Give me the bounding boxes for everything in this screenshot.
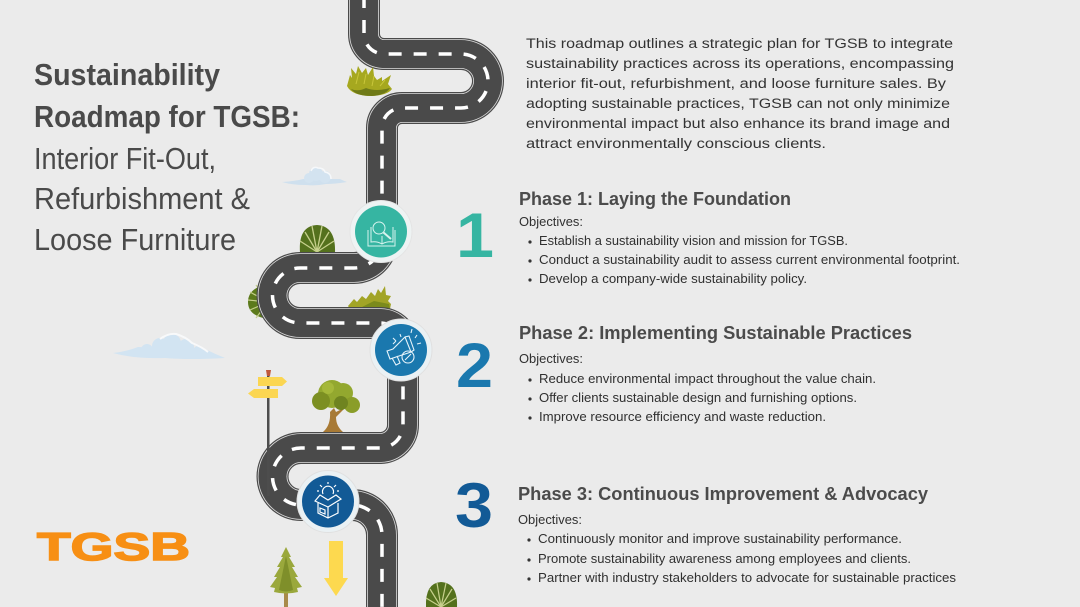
objectives: phase 1: Develop a company-wide sustainability policy. <box>539 272 807 286</box>
number 1: 1 <box>456 201 494 271</box>
objectives: phase 2: Reduce environmental impact throughout the value chain. <box>539 372 876 386</box>
objectives: phase 1: Objectives: <box>519 215 583 229</box>
title: Loose Furniture <box>34 222 236 257</box>
intro text block: adopting sustainable practices, TGSB can not only minimize <box>526 96 950 111</box>
heading: phase 2: Phase 2: Implementing Sustainable Practices <box>519 322 912 343</box>
objectives: phase 3: Partner with industry stakeholders to advocate for sustainable practices <box>538 571 956 585</box>
icon: fan plant bottom <box>426 582 457 607</box>
heading: phase 3: Phase 3: Continuous Improvement & Advocacy <box>518 483 929 504</box>
icon: signpost <box>248 370 287 496</box>
title: Sustainability <box>34 57 221 92</box>
objectives: phase 3: Promote sustainability awareness among employees and clients. <box>538 552 911 566</box>
intro text block <box>526 36 954 151</box>
icon: step 1 book and magnifier <box>350 200 412 262</box>
icon: cloud upper <box>282 167 347 185</box>
icon: bush middle <box>348 286 391 309</box>
objectives: phase 2: Improve resource efficiency and waste reduction. <box>539 410 826 424</box>
panel: phase 3 <box>518 483 956 585</box>
intro text block: attract environmentally conscious clients. <box>526 136 826 151</box>
objectives: phase 1 <box>519 215 960 286</box>
road <box>272 0 488 607</box>
heading: phase 1: Phase 1: Laying the Foundation <box>519 188 791 209</box>
icon: pine tree <box>270 547 302 607</box>
logo: TGSB: TGSB <box>37 526 190 569</box>
panel: phase 2 <box>519 322 912 424</box>
objectives: phase 2: Objectives: <box>519 352 583 366</box>
intro text block: This roadmap outlines a strategic plan for TGSB to integrate <box>526 36 953 51</box>
arrow: yellow down <box>324 541 348 596</box>
icon: step 2 megaphone <box>370 319 432 381</box>
icon: tree <box>312 380 360 432</box>
objectives: phase 3: Continuously monitor and improve sustainability performance. <box>538 532 902 546</box>
objectives: phase 3: Objectives: <box>518 513 582 527</box>
number 2: 2 <box>456 331 493 401</box>
icon: cloud lower <box>113 334 225 359</box>
title: Refurbishment & <box>34 181 250 216</box>
intro text block: interior fit-out, refurbishment, and loose furniture sales. By <box>526 76 946 91</box>
icon: step 3 box and bulb <box>297 470 359 532</box>
objectives: phase 1: Conduct a sustainability audit to assess current environmental footprint. <box>539 253 960 267</box>
intro text block: sustainability practices across its operations, encompassing <box>526 56 954 71</box>
panel: phase 1 <box>519 188 960 286</box>
objectives: phase 3 <box>518 513 956 585</box>
title <box>34 57 300 257</box>
objectives: phase 2 <box>519 352 876 424</box>
title: Roadmap for TGSB: <box>34 99 300 134</box>
icon: fan plant left <box>248 284 268 319</box>
objectives: phase 1: Establish a sustainability vision and mission for TGSB. <box>539 234 848 248</box>
number 3: 3 <box>455 471 493 541</box>
icon: bush top <box>347 66 392 96</box>
intro text block: environmental impact but also enhance its brand image and <box>526 116 950 131</box>
icon: fan plant upper <box>300 225 335 253</box>
objectives: phase 2: Offer clients sustainable design and furnishing options. <box>539 391 857 405</box>
title: Interior Fit-Out, <box>34 141 216 176</box>
